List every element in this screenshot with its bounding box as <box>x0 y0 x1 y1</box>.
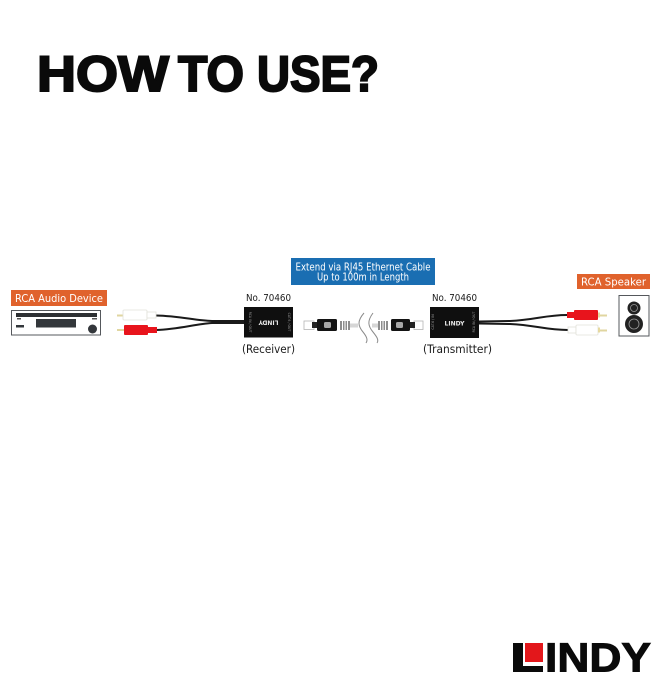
icon: left white RCA plug <box>117 310 156 320</box>
icon: cable break marks <box>359 313 378 343</box>
label: receiver: (Receiver) <box>242 342 295 356</box>
label: RCA Audio Device: RCA Audio Device <box>15 292 103 305</box>
icon: transmitter box: CAT.6 / IN <box>431 314 435 330</box>
callout: Ethernet extension: Extend via RJ45 Ethernet Cable <box>296 262 430 274</box>
callout: Ethernet extension <box>291 258 435 285</box>
icon: right red RCA plug <box>567 310 607 320</box>
label: transmitter: (Transmitter) <box>423 342 492 356</box>
logo: LINDY: INDY <box>545 634 651 680</box>
icon: receiver box: RCA IN / OUT <box>248 312 252 332</box>
icon: speaker <box>619 296 649 336</box>
cable: transmitter to right RCA plugs <box>479 315 568 330</box>
title: USE? <box>257 46 379 102</box>
icon: left RJ45 connector <box>304 319 358 331</box>
icon: receiver box: LINDY <box>258 319 278 326</box>
icon: receiver box: CAT.6 / OUT <box>287 313 291 331</box>
label: receiver model number: No. 70460 <box>246 293 291 304</box>
icon: right white RCA plug <box>568 325 607 335</box>
label: transmitter model number: No. 70460 <box>432 293 477 304</box>
callout: Ethernet extension: Up to 100m in Length <box>317 272 409 284</box>
title: TO <box>178 46 244 102</box>
icon: RCA audio device <box>12 310 100 335</box>
cable: left RCA plugs to receiver <box>156 316 245 330</box>
icon: transmitter box: RCA IN / OUT <box>472 312 476 332</box>
icon: left red RCA plug <box>117 325 157 335</box>
title: HOW <box>37 46 170 102</box>
title <box>37 46 379 102</box>
label: RCA Speaker: RCA Speaker <box>581 276 646 288</box>
icon: receiver box <box>244 307 293 338</box>
icon: right RJ45 connector <box>372 319 423 331</box>
icon: transmitter box <box>430 307 479 338</box>
icon: transmitter box: LINDY <box>445 320 465 328</box>
